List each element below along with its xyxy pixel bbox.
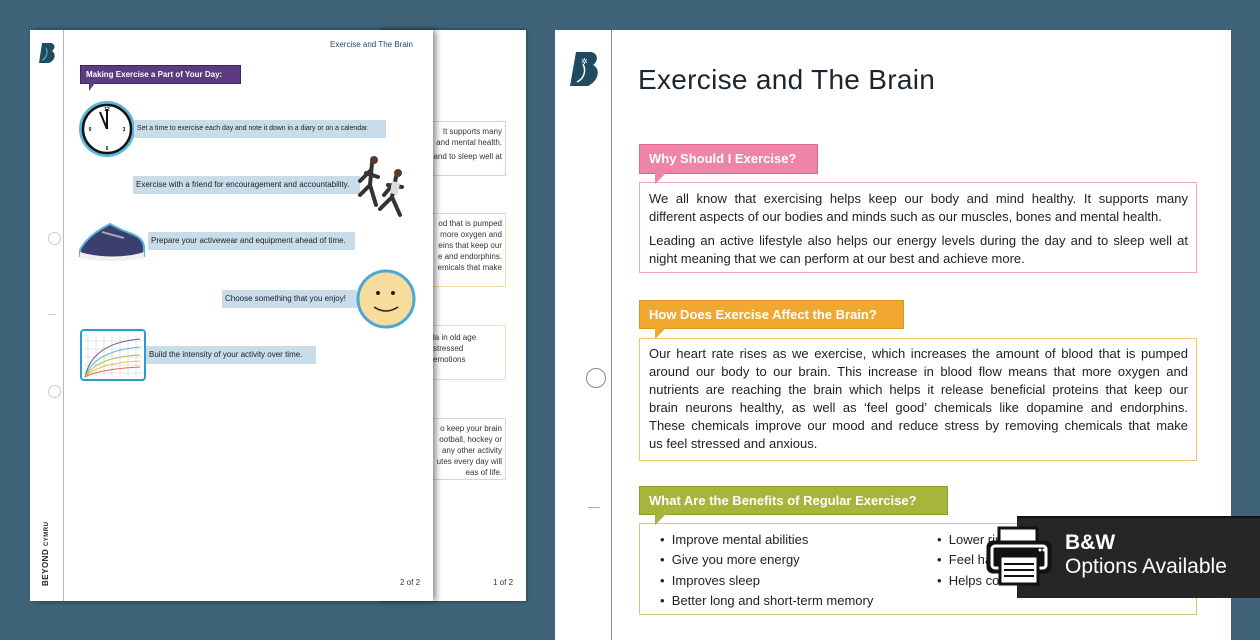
section 2 box: nutrients are reaching the brain which helps it release beneficial proteins that keep our xyxy=(649,382,1188,397)
box fragment green: emotions xyxy=(433,355,465,364)
binder holes xyxy=(48,232,61,245)
section 1 heading xyxy=(639,144,818,174)
icon: shoe xyxy=(79,222,145,261)
tip 4: Choose something that you enjoy! xyxy=(225,294,346,303)
holes xyxy=(586,368,606,388)
icon: clock xyxy=(79,101,134,157)
tip 2: Exercise with a friend for encouragement and accountability. xyxy=(136,180,349,189)
page 2 of 2 xyxy=(30,30,433,601)
section 3 box: • Improve mental abilities xyxy=(660,532,808,547)
main page 1 xyxy=(555,30,1231,640)
section 3 box: • Lower risk of dementia in old age xyxy=(937,532,1140,547)
tip 5: Build the intensity of your activity over time. xyxy=(149,350,302,359)
icon: clock: 12 xyxy=(104,107,110,113)
section 3 box: • Feel happier and less stressed xyxy=(937,552,1126,567)
section 2 heading: How Does Exercise Affect the Brain? xyxy=(649,307,877,322)
logo: ✲ xyxy=(581,57,588,66)
section 2 heading xyxy=(639,300,904,329)
box fragment orange: e and endorphins. xyxy=(438,252,502,261)
purple heading: Making Exercise a Part of Your Day: xyxy=(86,70,222,79)
icon: smiley xyxy=(356,270,416,328)
tip 4 xyxy=(222,290,357,308)
tip 1 xyxy=(134,120,386,138)
logo small xyxy=(39,43,55,63)
section 2 box: us feel stressed and anxious. xyxy=(649,436,817,451)
tip 2 xyxy=(133,176,360,194)
tip 1: Set a time to exercise each day and note it down in a diary or on a calendar. xyxy=(137,125,369,132)
tip 5 xyxy=(146,346,316,364)
section 3 box: • Improves sleep xyxy=(660,573,760,588)
brand vertical: BEYOND CYMRU xyxy=(41,522,50,586)
box fragment orange: od that is pumped xyxy=(438,219,502,228)
icon: runners xyxy=(358,156,404,218)
page number 1: 1 of 2 xyxy=(493,578,513,587)
box fragment teal: ootball, hockey or xyxy=(439,435,502,444)
box fragment teal: eas of life. xyxy=(466,468,502,477)
section 3 box: • Helps control your emotions xyxy=(937,573,1110,588)
header: Exercise and The Brain xyxy=(330,40,413,49)
purple heading xyxy=(80,65,241,84)
section 2 box: These chemicals improve our mood and reduce stress by removing chemicals that make xyxy=(649,418,1188,433)
badge text: B&W xyxy=(1065,531,1115,554)
section 3 box xyxy=(639,523,1197,615)
box fragment pink: It supports many xyxy=(443,127,502,136)
section 1 box: night meaning that we can perform at our best and achieve more. xyxy=(649,251,1025,266)
section 1 box xyxy=(639,182,1197,273)
box fragment green xyxy=(420,325,506,380)
page 1 of 2 behind xyxy=(380,30,526,601)
section 3 heading xyxy=(639,486,948,515)
section 3 heading: What Are the Benefits of Regular Exercise? xyxy=(649,493,917,508)
page number 2: 2 of 2 xyxy=(400,578,420,587)
B&W badge: Options Available xyxy=(1065,555,1227,578)
logo xyxy=(570,52,598,86)
icon: clock: 3 xyxy=(123,127,126,133)
B&W badge xyxy=(986,516,1260,598)
section 2 box: Our heart rate rises as we exercise, which increases the amount of blood that is pumped xyxy=(649,346,1188,361)
box fragment teal: o keep your brain xyxy=(440,424,502,433)
section 3 box: • Give you more energy xyxy=(660,552,800,567)
box fragment orange: eins that keep our xyxy=(438,241,502,250)
box fragment teal xyxy=(420,418,506,480)
box fragment teal: utes every day will xyxy=(437,457,502,466)
box fragment orange: more oxygen and xyxy=(440,230,502,239)
tip 3: Prepare your activewear and equipment ahead of time. xyxy=(151,236,346,245)
box fragment orange xyxy=(420,213,506,287)
title: Exercise and The Brain xyxy=(638,64,935,95)
section 1 box: Leading an active lifestyle also helps our energy levels during the day and to sleep well at xyxy=(649,233,1188,248)
icon: graph xyxy=(80,329,146,381)
section 2 box: around our body to our brain. This increase in blood flow means that more oxygen and xyxy=(649,364,1188,379)
section 2 box xyxy=(639,338,1197,461)
section 2 box: brain neurons healthy, as well as ‘feel good’ chemicals like dopamine and endorphins. xyxy=(649,400,1188,415)
icon: clock: 6 xyxy=(106,146,109,152)
section 1 box: different aspects of our bodies and minds such as our muscles, bones and mental health. xyxy=(649,209,1162,224)
box fragment pink: and to sleep well at xyxy=(434,152,502,161)
box fragment pink: and mental health. xyxy=(436,138,502,147)
box fragment green: stressed xyxy=(433,344,463,353)
icon: printer xyxy=(986,526,1052,586)
tip 3 xyxy=(148,232,355,250)
section 1 heading: Why Should I Exercise? xyxy=(649,151,796,166)
icon: clock: 9 xyxy=(89,127,92,133)
box fragment pink xyxy=(420,121,506,176)
section 1 box: We all know that exercising helps keep our body and mind healthy. It supports many xyxy=(649,191,1188,206)
box fragment teal: any other activity xyxy=(442,446,502,455)
box fragment orange: emicals that make xyxy=(438,263,502,272)
section 3 box: • Better long and short-term memory xyxy=(660,593,873,608)
box fragment green: la in old age xyxy=(433,333,476,342)
